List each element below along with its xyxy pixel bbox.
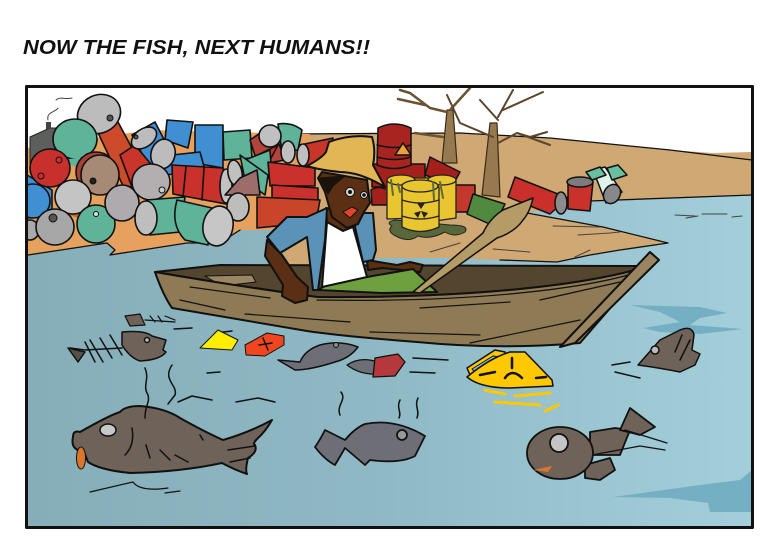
bottom right fish	[527, 408, 667, 480]
boat seat	[205, 275, 256, 286]
fish eye	[397, 430, 407, 440]
yellow jerrycan	[467, 350, 558, 411]
horizon line	[290, 133, 752, 262]
fish skeleton	[68, 332, 166, 362]
head	[318, 172, 370, 228]
pants	[318, 269, 437, 293]
arm left	[265, 240, 308, 303]
panel: polluted river scene	[16, 87, 752, 527]
hat	[307, 136, 385, 187]
neck	[326, 208, 355, 231]
man	[265, 136, 437, 303]
blue barrels	[27, 120, 223, 218]
stink lines	[145, 328, 640, 418]
red barrels centre	[268, 162, 315, 186]
grey drum with red body	[98, 122, 132, 187]
panel frame	[26, 86, 752, 528]
green barrel	[467, 194, 505, 226]
small skeleton	[125, 314, 175, 326]
water ripples and cracks	[430, 214, 742, 257]
lip	[76, 447, 86, 469]
mouth	[343, 207, 358, 218]
eyes	[346, 188, 368, 198]
eye	[100, 424, 116, 436]
boat hull	[154, 270, 632, 348]
grey fish top	[278, 342, 358, 370]
stern post	[560, 252, 659, 347]
jacket left	[267, 208, 327, 290]
radiation sign	[414, 203, 428, 218]
hair	[320, 176, 345, 194]
red drums behind man	[371, 124, 475, 212]
yellow carton	[200, 330, 238, 350]
dead tree right	[447, 90, 550, 197]
red horizontal barrel	[172, 165, 226, 204]
barrel bungs	[38, 114, 166, 222]
orange shore	[27, 130, 310, 255]
shore line	[28, 230, 240, 255]
small fish and red cup	[347, 354, 405, 377]
boat interior	[155, 265, 637, 297]
red bottle	[245, 333, 284, 356]
big dead fish	[72, 406, 272, 493]
house with smoke	[30, 98, 72, 165]
toxic spills	[389, 220, 466, 240]
water	[27, 190, 752, 527]
boat	[155, 252, 659, 347]
shirt	[322, 222, 367, 287]
red box drum	[257, 197, 320, 228]
grey fish middle	[315, 422, 425, 465]
hull planks	[180, 274, 632, 343]
green lying barrels	[146, 197, 185, 235]
title: NOW THE FISH, NEXT HUMANS!!	[23, 37, 370, 59]
yellow radioactive barrels	[387, 175, 456, 232]
hazard label	[395, 143, 411, 155]
red barrels right	[508, 165, 627, 214]
right floating fish	[638, 328, 700, 372]
left pile of barrels	[16, 87, 333, 248]
arm right	[367, 260, 423, 272]
background land and peninsula	[283, 133, 752, 268]
dead tree left	[398, 88, 470, 163]
pale water shadows	[613, 305, 752, 512]
mid pile behind	[250, 125, 285, 165]
green upper barrels	[223, 130, 252, 160]
jacket right	[355, 213, 376, 262]
paddle	[413, 198, 533, 293]
